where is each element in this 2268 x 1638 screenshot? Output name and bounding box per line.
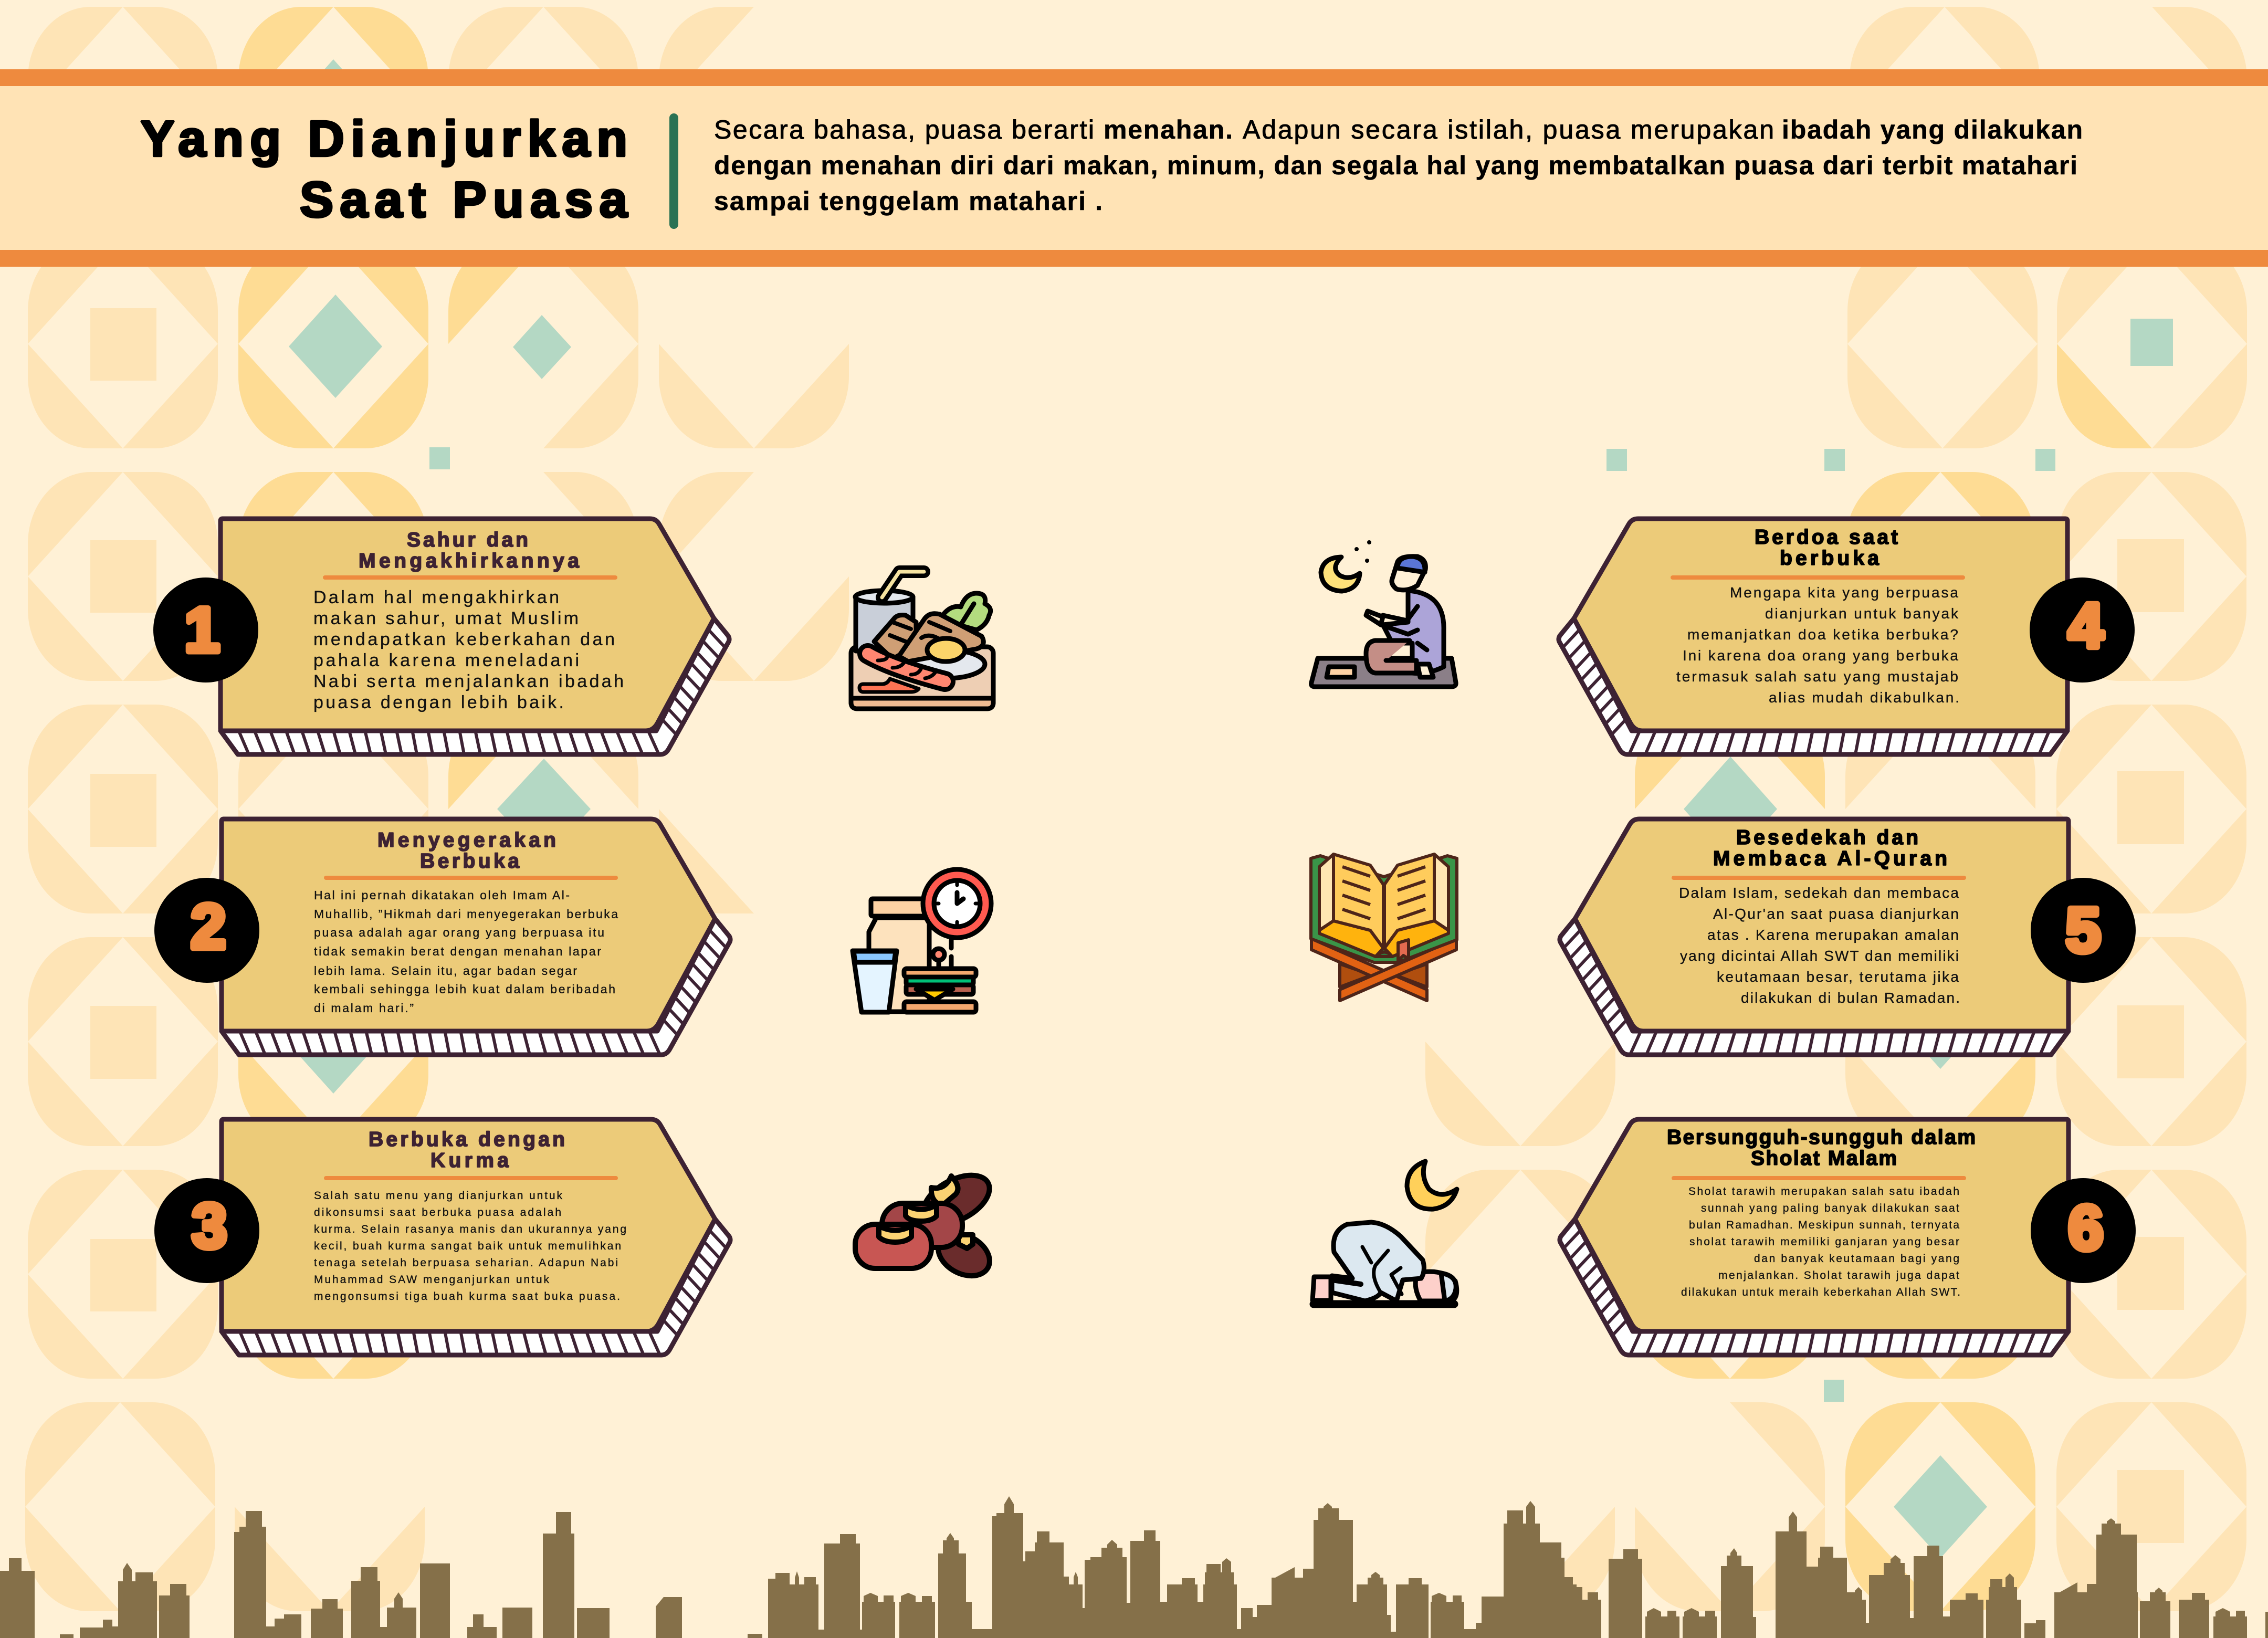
number 3 bbox=[154, 1178, 259, 1283]
card shape bbox=[1560, 1119, 2068, 1355]
header band bbox=[0, 69, 2268, 267]
header background bbox=[0, 86, 2268, 250]
body text: dianjurkan untuk banyak bbox=[1765, 605, 1959, 622]
title bbox=[141, 111, 628, 228]
icon: sahur meal tray bbox=[851, 572, 993, 709]
body text: tidak semakin berat dengan menahan lapar bbox=[314, 944, 601, 958]
panel 5: Besedekah dan Membaca Al-Quran bbox=[1560, 819, 2136, 1055]
body text: lebih lama. Selain itu, agar badan segar bbox=[314, 964, 577, 978]
heading: Mengakhirkannya bbox=[359, 550, 579, 572]
body text: di malam hari.” bbox=[314, 1001, 414, 1015]
heading: Membaca Al-Quran bbox=[1713, 847, 1947, 870]
heading: berbuka bbox=[1780, 547, 1879, 570]
heading bbox=[369, 1128, 565, 1172]
heading: Menyegerakan bbox=[377, 829, 556, 852]
heading: Sholat Malam bbox=[1751, 1147, 1897, 1170]
icon: dates bbox=[855, 1166, 998, 1284]
heading: Sahur dan bbox=[407, 529, 528, 551]
underline bbox=[1672, 876, 1966, 880]
body text: kecil, buah kurma sangat baik untuk memulihkan bbox=[314, 1240, 621, 1252]
body text bbox=[1681, 1185, 1960, 1298]
body text: mendapatkan keberkahan dan bbox=[313, 629, 615, 649]
underline bbox=[1672, 1176, 1966, 1180]
green divider bbox=[669, 113, 678, 229]
body text: dilakukan di bulan Ramadan. bbox=[1741, 990, 1960, 1006]
number 6: 6 bbox=[2068, 1193, 2103, 1263]
header bottom stripe bbox=[0, 250, 2268, 267]
heading: Berbuka bbox=[420, 850, 519, 873]
body text: Muhammad SAW menganjurkan untuk bbox=[314, 1274, 549, 1286]
number 5: 5 bbox=[2066, 895, 2101, 965]
body text: Nabi serta menjalankan ibadah bbox=[313, 671, 624, 691]
body text: termasuk salah satu yang mustajab bbox=[1676, 668, 1958, 685]
panel 2: Menyegerakan Berbuka bbox=[154, 819, 730, 1055]
body text: Sholat tarawih merupakan salah satu ibadah bbox=[1688, 1185, 1959, 1198]
body text: Mengapa kita yang berpuasa bbox=[1730, 584, 1958, 601]
intro text: Secara bahasa, puasa berarti bbox=[714, 115, 1094, 144]
body text: kembali sehingga lebih kuat dalam beribadah bbox=[314, 982, 615, 996]
intro text bbox=[714, 115, 2083, 216]
number 2: 2 bbox=[191, 891, 226, 962]
heading: Berdoa saat bbox=[1755, 526, 1898, 549]
body text: Ini karena doa orang yang berbuka bbox=[1683, 647, 1958, 664]
intro text: menahan. bbox=[1104, 115, 1233, 144]
body text: menjalankan. Sholat tarawih juga dapat bbox=[1718, 1269, 1959, 1282]
body text: Al-Qur'an saat puasa dianjurkan bbox=[1713, 906, 1959, 922]
body text: dilakukan untuk meraih keberkahan Allah SWT. bbox=[1681, 1286, 1960, 1298]
body text: Salah satu menu yang dianjurkan untuk bbox=[314, 1190, 563, 1202]
body text bbox=[314, 888, 618, 1015]
body text: mengonsumsi tiga buah kurma saat buka puasa. bbox=[314, 1290, 620, 1303]
skyline silhouette bbox=[0, 1496, 2268, 1638]
card shape bbox=[222, 819, 730, 1055]
heading bbox=[377, 829, 556, 873]
body text: sholat tarawih memiliki ganjaran yang besar bbox=[1689, 1236, 1959, 1248]
number 4: 4 bbox=[2068, 591, 2104, 661]
body text: kurma. Selain rasanya manis dan ukurannya yang bbox=[314, 1223, 626, 1235]
body text: bulan Ramadhan. Meskipun sunnah, ternyata bbox=[1689, 1219, 1959, 1231]
body text: dikonsumsi saat berbuka puasa adalah bbox=[314, 1206, 561, 1219]
body text bbox=[1676, 584, 1959, 706]
card shape bbox=[222, 1119, 730, 1355]
card shape bbox=[220, 519, 729, 754]
icon: iftar clock, drink and sandwich bbox=[853, 869, 991, 1012]
panel 4: Berdoa saat berbuka bbox=[1559, 519, 2135, 754]
heading: Kurma bbox=[430, 1149, 509, 1172]
header top stripe bbox=[0, 69, 2268, 86]
body text: Muhallib, ”Hikmah dari menyegerakan berbuka bbox=[314, 907, 618, 921]
icon: open Quran on stand bbox=[1311, 854, 1457, 1001]
underline bbox=[324, 1176, 618, 1180]
body text: Hal ini pernah dikatakan oleh Imam Al- bbox=[314, 888, 570, 902]
number 6 bbox=[2031, 1178, 2136, 1283]
heading: Bersungguh-sungguh dalam bbox=[1667, 1126, 1976, 1149]
heading bbox=[359, 529, 579, 572]
body text: keutamaan besar, terutama jika bbox=[1717, 969, 1959, 985]
intro text: sampai tenggelam matahari . bbox=[714, 186, 1102, 216]
body text: puasa dengan lebih baik. bbox=[313, 692, 564, 712]
underline bbox=[1671, 575, 1965, 580]
panel 1: Sahur dan Mengakhirkannya bbox=[153, 519, 729, 754]
body text: pahala karena meneladani bbox=[313, 650, 579, 670]
body text: tenaga setelah berpuasa seharian. Adapun Nabi bbox=[314, 1257, 618, 1269]
intro text: dengan menahan diri dari makan, minum, dan segala hal yang membatalkan puasa dari terbit matahari bbox=[714, 151, 2077, 180]
body text: sunnah yang paling banyak dilakukan saat bbox=[1701, 1202, 1959, 1214]
body text bbox=[314, 1190, 626, 1303]
underline bbox=[323, 575, 617, 580]
intro text: ibadah yang dilakukan bbox=[1782, 115, 2083, 144]
card shape bbox=[1559, 519, 2067, 754]
number 1: 1 bbox=[185, 595, 219, 665]
body text: alias mudah dikabulkan. bbox=[1769, 689, 1959, 706]
body text: memanjatkan doa ketika berbuka? bbox=[1687, 626, 1958, 643]
number 5 bbox=[2031, 878, 2136, 983]
heading: Besedekah dan bbox=[1736, 826, 1918, 849]
number 4 bbox=[2030, 578, 2135, 682]
card shape bbox=[1560, 819, 2068, 1055]
panel 6: Bersungguh-sungguh dalam Sholat Malam bbox=[1560, 1119, 2136, 1355]
heading: Berbuka dengan bbox=[369, 1128, 565, 1151]
body text: Dalam hal mengakhirkan bbox=[313, 587, 559, 607]
heading bbox=[1755, 526, 1898, 570]
number 3: 3 bbox=[192, 1191, 227, 1261]
panel 3: Berbuka dengan Kurma bbox=[154, 1119, 730, 1355]
heading bbox=[1667, 1126, 1976, 1170]
intro text: Adapun secara istilah, puasa merupakan bbox=[1243, 115, 1774, 144]
body text: atas . Karena merupakan amalan bbox=[1707, 927, 1959, 943]
body text: makan sahur, umat Muslim bbox=[313, 608, 579, 628]
body text: yang dicintai Allah SWT dan memiliki bbox=[1680, 948, 1959, 964]
number 2 bbox=[154, 878, 259, 983]
icon: person in sujud under crescent bbox=[1312, 1161, 1457, 1306]
body text bbox=[1679, 885, 1960, 1006]
underline bbox=[324, 876, 618, 880]
body text bbox=[313, 587, 624, 712]
body text: Dalam Islam, sedekah dan membaca bbox=[1679, 885, 1959, 901]
heading bbox=[1713, 826, 1947, 870]
title: Yang Dianjurkan bbox=[141, 111, 627, 167]
body text: dan banyak keutamaan bagi yang bbox=[1754, 1253, 1959, 1265]
body text: puasa adalah agar orang yang berpuasa itu bbox=[314, 926, 604, 939]
icon: man praying at night bbox=[1311, 540, 1456, 687]
number 1 bbox=[153, 578, 258, 682]
title: Saat Puasa bbox=[300, 172, 628, 228]
